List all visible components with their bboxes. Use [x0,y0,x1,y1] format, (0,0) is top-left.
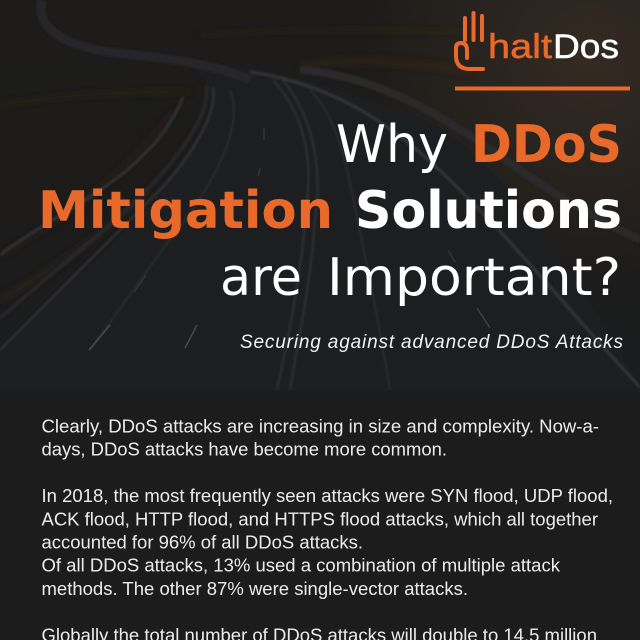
logo: haltDos: Dos [553,28,619,66]
logo divider [455,86,630,90]
body text: ACK flood, HTTP flood, and HTTPS flood attacks, which all together [42,508,598,529]
body background [0,391,640,640]
title: Why [336,115,448,175]
body text: days, DDoS attacks have become more common. [42,439,447,460]
title [38,115,622,308]
logo wordmark: halt [488,28,553,66]
upper road winding [41,0,250,80]
lane dashes [89,128,490,350]
road surface [0,64,640,391]
road edge lines [0,70,640,390]
title: Mitigation [38,181,333,241]
hero background: night highway photo [0,0,640,391]
body text: Clearly, DDoS attacks are increasing in size and complexity. Now-a- [42,416,599,436]
subtitle: Securing against advanced DDoS Attacks [240,332,624,353]
title: Solutions [355,181,622,241]
body text: Of all DDoS attacks, 13% used a combination of multiple attack [42,555,561,576]
title: Important? [327,248,621,308]
body text: methods. The other 87% were single-vector attacks. [42,578,468,599]
icon: hand [456,13,483,69]
logo: haltDos [456,13,619,69]
body text: accounted for 96% of all DDoS attacks. [42,532,363,552]
body text [42,416,613,640]
body text: In 2018, the most frequently seen attacks were SYN flood, UDP flood, [42,485,613,506]
title: are [220,248,302,308]
grass bands [0,30,470,300]
title: DDoS [471,115,622,175]
